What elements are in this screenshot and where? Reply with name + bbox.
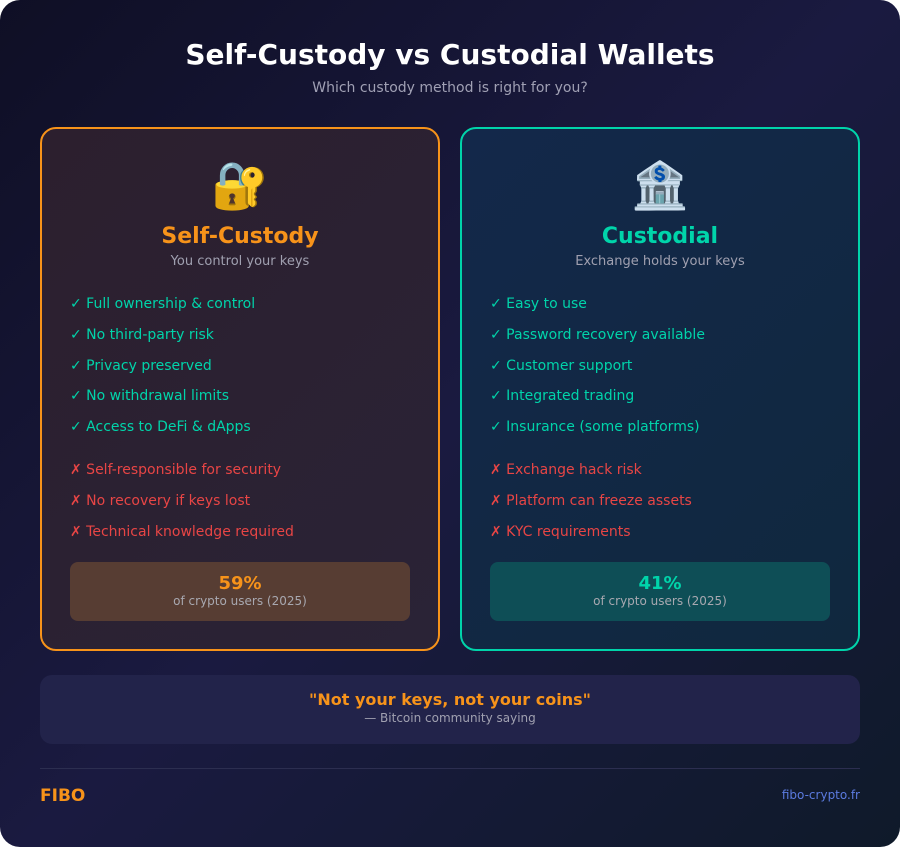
footer brand: FIBO: [40, 786, 85, 806]
icon: bank: 🏦: [631, 158, 689, 212]
subtitle: Which custody method is right for you?: [312, 80, 588, 96]
stat: 59%: [70, 562, 410, 621]
footer link: fibo-crypto.fr: [782, 788, 860, 802]
cons list: ✗ KYC requirements: [490, 524, 631, 540]
subheading: Exchange holds your keys: [575, 254, 745, 269]
pros list: [70, 296, 255, 435]
cons list: ✗ No recovery if keys lost: [70, 493, 250, 509]
pros list: ✓ Privacy preserved: [70, 358, 212, 374]
panel: custodial: [460, 127, 860, 651]
pros list: ✓ Full ownership & control: [70, 296, 255, 312]
cons list: ✗ Technical knowledge required: [70, 524, 294, 540]
cons list: ✗ Exchange hack risk: [490, 462, 642, 478]
cons list: ✗ Self-responsible for security: [70, 462, 281, 478]
title: Self-Custody vs Custodial Wallets: [185, 38, 715, 71]
cons list: [70, 462, 294, 540]
quote callout: — Bitcoin community saying: [364, 711, 536, 725]
pros list: ✓ No third-party risk: [70, 327, 214, 343]
heading: self-custody: Self-Custody: [161, 224, 319, 249]
pros list: [490, 296, 705, 435]
pros list: ✓ Insurance (some platforms): [490, 419, 700, 435]
pros list: ✓ No withdrawal limits: [70, 388, 229, 404]
stat: 59%: 59%: [218, 573, 262, 594]
pros list: ✓ Access to DeFi & dApps: [70, 419, 251, 435]
stat: 41%: of crypto users (2025): [593, 594, 727, 608]
pros list: ✓ Integrated trading: [490, 388, 634, 404]
stat: 41%: 41%: [638, 573, 682, 594]
cons list: [490, 462, 692, 540]
pros list: ✓ Easy to use: [490, 296, 587, 312]
quote callout: [40, 675, 860, 744]
cons list: ✗ Platform can freeze assets: [490, 493, 692, 509]
quote callout: "Not your keys, not your coins": [309, 690, 591, 709]
icon: lock with key: 🔐: [211, 158, 269, 212]
pros list: ✓ Password recovery available: [490, 327, 705, 343]
panel: self-custody: [40, 127, 440, 651]
stat: 59%: of crypto users (2025): [173, 594, 307, 608]
heading: custodial: Custodial: [602, 224, 718, 249]
pros list: ✓ Customer support: [490, 358, 632, 374]
stat: 41%: [490, 562, 830, 621]
subheading: You control your keys: [171, 254, 309, 269]
